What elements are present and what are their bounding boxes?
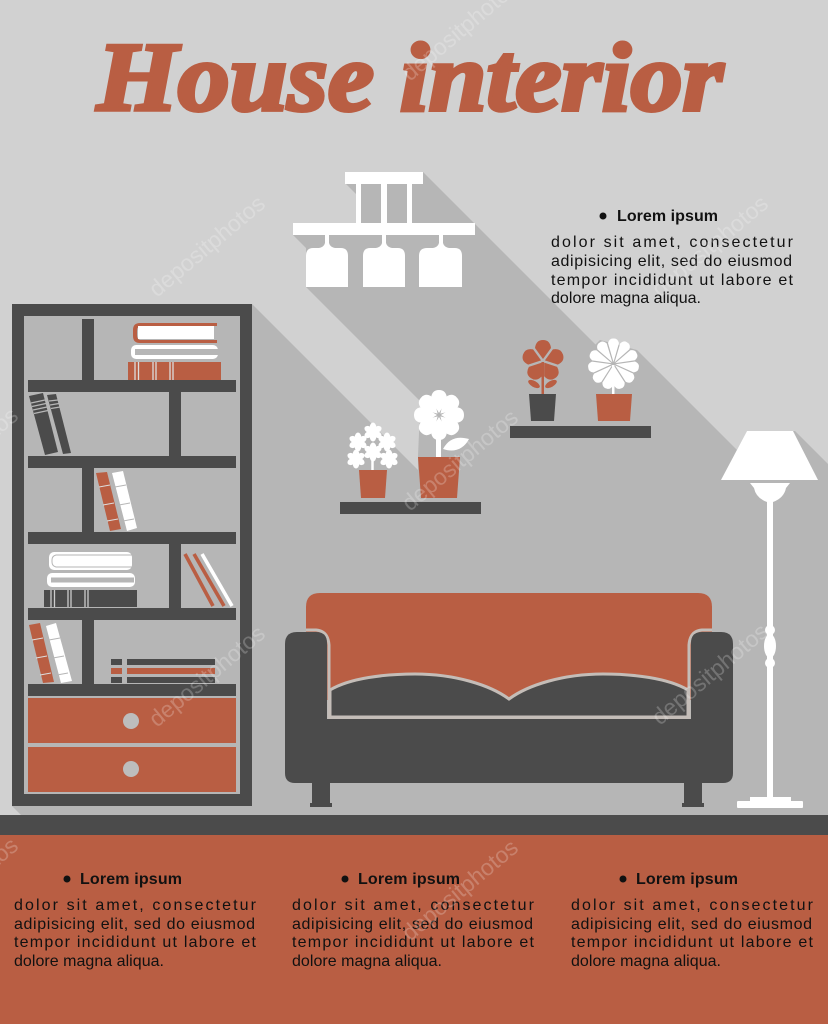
- seat cushions: [330, 674, 688, 717]
- sofa back: [306, 593, 712, 700]
- text block: bottom left: Lorem ipsum: [80, 871, 182, 888]
- stock watermarks: depositphotos: [647, 618, 773, 730]
- text block: bottom right: adipisicing elit, sed do eiusmod: [571, 916, 812, 933]
- red and white leaning books lower: [29, 623, 72, 683]
- small white flowers in red pot: [346, 422, 399, 498]
- text block: bottom right: [571, 871, 814, 970]
- text block: bottom middle: tempor incididunt ut labore et: [292, 934, 535, 951]
- sofa body and arms: [285, 632, 733, 783]
- drawers: [28, 698, 236, 792]
- sofa outline: [306, 630, 712, 718]
- bookcase frame: [12, 304, 252, 806]
- text block: bottom left: dolor sit amet, consectetur: [14, 897, 257, 914]
- stock watermarks: depositphotos: [397, 404, 523, 516]
- text block: bottom left: dolore magna aliqua.: [14, 953, 164, 970]
- text block: top right: tempor incididunt ut labore et: [551, 272, 794, 289]
- floor: baseboard and panel: [0, 815, 828, 1024]
- white flower in red pot: [587, 338, 640, 421]
- stock watermarks: depositphotos: [144, 620, 270, 732]
- bookcase: [12, 304, 252, 806]
- text block: top right: [551, 208, 794, 307]
- ceiling lamp: [293, 172, 475, 287]
- dark leaning books: [29, 393, 71, 455]
- text block: bottom left: adipisicing elit, sed do eiusmod: [14, 916, 255, 933]
- thin leaning books: [185, 554, 232, 606]
- text block: bottom middle: adipisicing elit, sed do eiusmod: [292, 916, 533, 933]
- text block: bottom right: Lorem ipsum: [636, 871, 738, 888]
- text block: bottom right: dolor sit amet, consectetur: [571, 897, 814, 914]
- text block: bottom middle: dolor sit amet, consectetur: [292, 897, 535, 914]
- long shadows on wall: [12, 172, 828, 898]
- stock watermarks: depositphotos: [647, 190, 773, 302]
- shelf: upper with plants: [510, 338, 651, 438]
- text block: top right: dolore magna aliqua.: [551, 290, 701, 307]
- red flower in dark pot: [521, 340, 565, 421]
- wall background: [0, 0, 828, 816]
- sofa: [285, 593, 733, 807]
- text block: bottom left: [14, 871, 257, 970]
- floor lamp: [721, 431, 818, 808]
- large white flower in red pot: [414, 390, 469, 498]
- text block: bottom middle: Lorem ipsum: [358, 871, 460, 888]
- sofa legs: [310, 783, 704, 807]
- text block: top right: Lorem ipsum: [617, 208, 718, 225]
- title: House interior: [96, 24, 724, 131]
- flat books: [111, 658, 215, 684]
- text block: top right: dolor sit amet, consectetur: [551, 234, 794, 251]
- text block: bottom left: tempor incididunt ut labore et: [14, 934, 257, 951]
- text block: bottom right: tempor incididunt ut labore et: [571, 934, 814, 951]
- book stack: white and dark: [44, 552, 137, 607]
- text block: bottom middle: dolore magna aliqua.: [292, 953, 442, 970]
- text block: bottom right: dolore magna aliqua.: [571, 953, 721, 970]
- text block: top right: adipisicing elit, sed do eiusmod: [551, 253, 792, 270]
- stock watermarks: depositphotos: [144, 190, 270, 302]
- stock watermarks: depositphotos: [397, 834, 523, 946]
- book stack: top shelf: [128, 323, 221, 380]
- shelves and dividers: [28, 319, 236, 696]
- text block: bottom middle: [292, 871, 535, 970]
- shelf: lower with plants: [340, 390, 481, 514]
- red and white leaning books: [96, 471, 137, 531]
